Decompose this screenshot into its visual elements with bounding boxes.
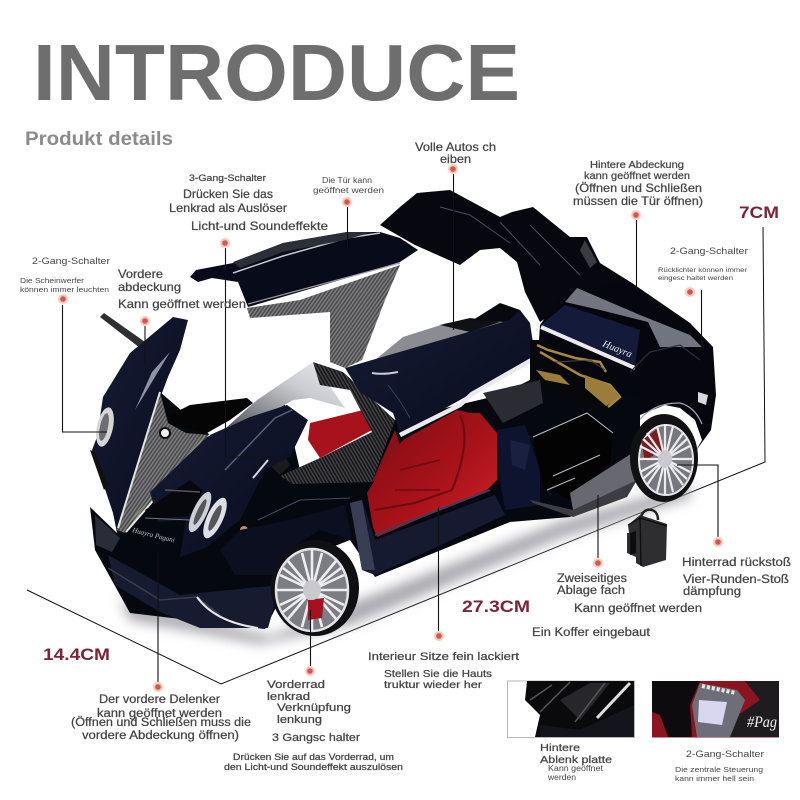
text: front wheel steering: 3 Gangsc halter (272, 732, 360, 744)
text: steering wheel switch (169, 173, 328, 233)
text: centre console (675, 749, 764, 783)
text: storage compartment (557, 573, 702, 615)
text: interior seats: Stellen Sie die Hauts (384, 668, 492, 680)
text: front wheel steering: Vorderrad (267, 679, 325, 691)
text: rear cover: (Öffnen und Schließen (575, 181, 702, 195)
raised front door (190, 232, 418, 307)
dimension label: width: 14.4CM (43, 645, 110, 664)
text: storage compartment: Kann geöffnet werden (574, 603, 702, 615)
carbon underside of raised door (247, 265, 400, 368)
text: steering wheel switch: Lenkrad als Auslöser (169, 201, 287, 215)
text: rear lights: 2-Gang-Schalter (670, 246, 748, 257)
roof and opened gull wing door (345, 303, 535, 435)
text: steering wheel switch: Licht-und Soundeffekte (191, 219, 328, 233)
carbon door frame (264, 362, 400, 484)
text: rear deflector: werden (547, 773, 576, 782)
windshield glass (227, 362, 345, 427)
dimension label: height: 7CM (739, 203, 779, 222)
text: storage compartment: Zweiseitiges (557, 573, 627, 585)
text: rear deflector (540, 742, 612, 782)
text: storage compartment: Ablage fach (557, 585, 625, 597)
text: front headlights: 2-Gang-Schalter (32, 256, 110, 267)
panel: rear deflector thumbnail (508, 681, 634, 738)
text: front wheel steering: Drücken Sie auf das Vorderrad, um (233, 752, 394, 762)
front deck (145, 405, 308, 557)
text: full car windows: Volle Autos ch (415, 140, 496, 154)
text: interior seats: truktur wieder her (384, 679, 483, 691)
text: front trunk: kann geöffnet werden (97, 708, 222, 720)
text: rear lights: eingesc haltet werden (658, 275, 733, 282)
rear wheel (630, 414, 698, 502)
text: front wheel steering: lenkrad (267, 691, 310, 703)
raised rear gull wing (380, 190, 640, 322)
text: rear deflector: Ablenk platte (540, 754, 612, 766)
callout dots (58, 164, 723, 692)
panel: centre console thumbnail (652, 681, 779, 738)
text: full car windows: eiben (440, 152, 471, 166)
front bumper and fenders (95, 498, 352, 628)
text: front wheel steering: den Licht-und Soundeffekt auszulösen (224, 762, 403, 772)
text: front headlights: können immer leuchten (20, 287, 109, 294)
storage compartment (530, 413, 639, 517)
text: front trunk: Der vordere Delenker (99, 694, 220, 706)
carbon centre of hood (117, 392, 210, 533)
text: front wheel steering (224, 679, 403, 772)
text: centre console: Die zentrale Steuerung (675, 765, 763, 774)
text: front cover: abdeckung (118, 280, 181, 294)
text: rear cover: kann geöffnet werden (584, 170, 690, 182)
text: door (313, 176, 384, 195)
signature on console: #Pag (747, 714, 777, 731)
text: front headlights (20, 256, 110, 294)
text: rear wheel: Vier-Runden-Stoß (683, 574, 789, 586)
subtitle: Produkt details (25, 129, 173, 150)
icon: suitcase (627, 510, 667, 567)
text: rear wheel: Hinterrad rückstoß (682, 557, 791, 569)
text: steering wheel switch: 3-Gang-Schalter (189, 173, 266, 184)
red interior seats (367, 380, 543, 537)
text: centre console: kann immer hell sein (675, 774, 754, 783)
text: interior seats: Interieur Sitze fein lackiert (368, 651, 519, 663)
signature on rear panel: Huayra (600, 338, 633, 360)
text: front wheel steering: Verknüpfung (277, 702, 351, 714)
text: rear deflector: Kann geöffnet (548, 764, 604, 773)
text: rear lights (658, 246, 748, 282)
dimension label: length: 27.3CM (462, 597, 530, 616)
text: front headlights: Die Scheinwerfer (20, 278, 85, 285)
callout lines (62, 174, 718, 682)
text: front wheel steering: lenkung (277, 714, 322, 726)
text: rear wheel (682, 557, 791, 598)
text: front trunk (71, 694, 251, 742)
text: interior seats (368, 651, 519, 691)
text: front cover (118, 267, 246, 311)
text: door: geöffnet werden (313, 186, 384, 195)
text: door: Die Tür kann (322, 176, 372, 185)
front script: Huayra Pagani (131, 526, 176, 544)
engine bay (530, 340, 625, 415)
text: front cover: Kann geöffnet werden (118, 297, 246, 311)
text: rear cover: müssen die Tür öffnen) (573, 194, 703, 208)
text: front cover: Vordere (118, 267, 163, 281)
body backing (90, 375, 640, 629)
text: rear lights: Rücklichter können immer (658, 267, 748, 274)
text: front trunk: vordere Abdeckung öffnen) (82, 730, 239, 742)
text: rear wheel: dämpfung (683, 586, 741, 598)
text: front trunk: (Öffnen und Schließen muss die (71, 717, 251, 729)
text: rear cover: Hintere Abdeckung (590, 159, 684, 171)
red interior behind windshield (308, 410, 372, 458)
text: rear deflector: Hintere (540, 742, 580, 754)
car illustration (90, 190, 716, 636)
car shadow (120, 485, 690, 644)
text: steering wheel switch: Drücken Sie das (183, 187, 273, 201)
text: rear cover (573, 159, 703, 208)
text: suitcase: Ein Koffer eingebaut (532, 627, 651, 639)
side sill (350, 425, 540, 575)
dimension lines (27, 227, 765, 684)
front wheel (271, 540, 359, 636)
text: full car windows (415, 140, 496, 166)
rear body (537, 283, 716, 490)
engine well under hood (170, 398, 253, 433)
text: centre console: 2-Gang-Schalter (686, 749, 764, 760)
title: INTRODUCE (33, 28, 520, 117)
raised front hood (90, 313, 188, 533)
